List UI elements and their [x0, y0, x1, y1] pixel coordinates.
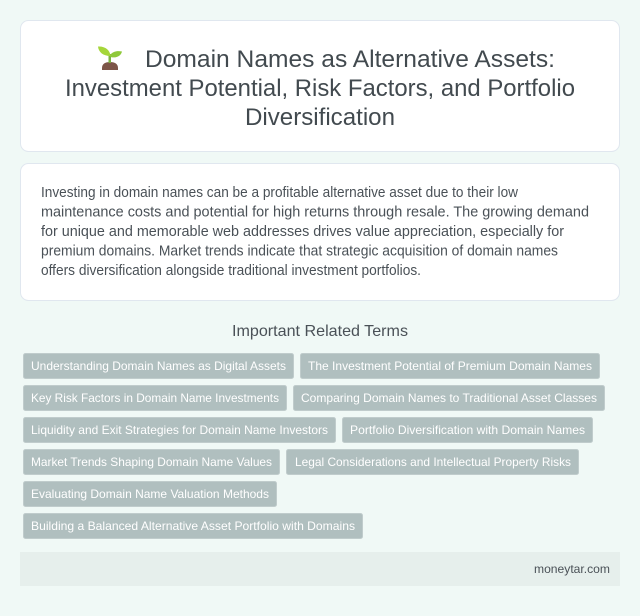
tag: Portfolio Diversification with Domain Names [350, 423, 585, 437]
tag: The Investment Potential of Premium Domain Names [308, 359, 592, 373]
tag [300, 354, 600, 378]
tag list [24, 354, 604, 538]
tag: Understanding Domain Names as Digital Assets [31, 359, 286, 373]
footer [20, 552, 620, 586]
tag [24, 514, 362, 538]
tag: Comparing Domain Names to Traditional Asset Classes [301, 391, 597, 405]
tag [24, 354, 294, 378]
tag: Key Risk Factors in Domain Name Investments [31, 391, 279, 405]
tag: Building a Balanced Alternative Asset Portfolio with Domains [31, 519, 355, 533]
tag [342, 418, 592, 442]
tag [24, 450, 280, 474]
tag: Legal Considerations and Intellectual Property Risks [295, 455, 571, 469]
tag: Evaluating Domain Name Valuation Methods [31, 487, 269, 501]
tag [24, 386, 286, 410]
description text: premium domains. Market trends indicate that strategic acquisition of domain names [41, 244, 558, 260]
description text: maintenance costs and potential for high returns through resale. The growing demand [41, 204, 589, 220]
title text [65, 46, 575, 131]
description text: Investing in domain names can be a profitable alternative asset due to their low [41, 185, 518, 201]
tag: Market Trends Shaping Domain Name Values [31, 455, 272, 469]
description text: offers diversification alongside traditional investment portfolios. [41, 263, 421, 279]
tag: Liquidity and Exit Strategies for Domain Name Investors [31, 423, 328, 437]
description text: for unique and memorable web addresses drives value appreciation, especially for [41, 224, 564, 240]
tag [24, 482, 276, 506]
tag [286, 450, 578, 474]
icon: sprout [98, 46, 122, 70]
title text: Investment Potential, Risk Factors, and Portfolio [65, 75, 575, 102]
title panel [20, 20, 620, 152]
heading: important related terms: Important Related Terms [232, 323, 408, 340]
footer: moneytar.com [534, 562, 610, 576]
tag [294, 386, 604, 410]
title text: Diversification [245, 104, 395, 131]
description text [41, 185, 589, 279]
title text: Domain Names as Alternative Assets: [145, 46, 555, 73]
tag [24, 418, 336, 442]
panel: description [20, 164, 620, 300]
